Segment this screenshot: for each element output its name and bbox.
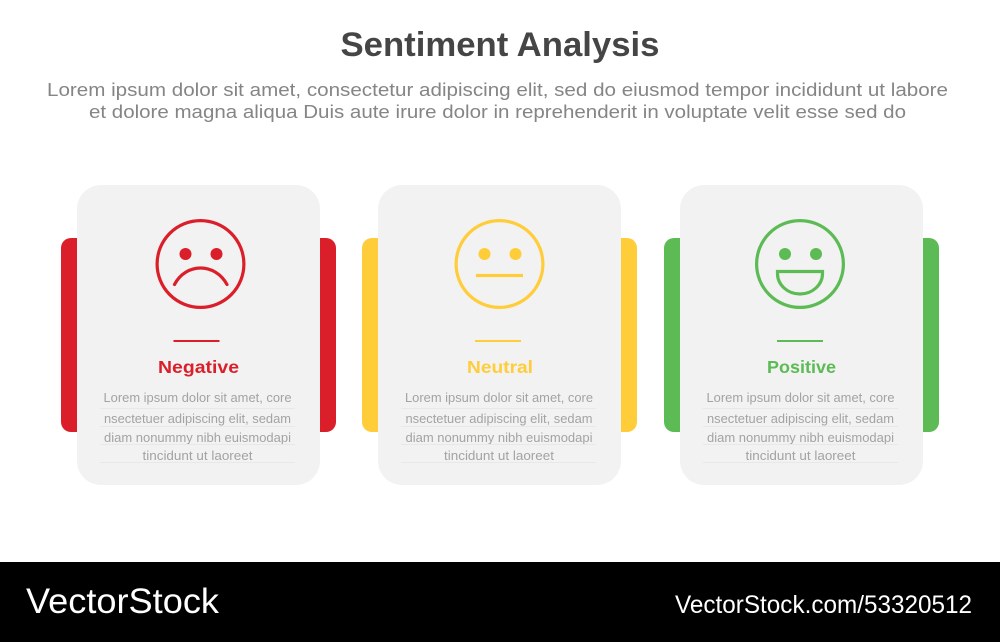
positive side tabs [664,238,939,432]
footer band [0,562,1000,642]
negative body text: tincidunt ut laoreet [142,449,253,463]
intro paragraph [47,79,948,122]
footer url: VectorStock.com/53320512 [675,591,972,619]
negative heading: Negative [158,357,239,377]
neutral body text: nsectetuer adipiscing elit, sedam [406,412,592,426]
positive body text: nsectetuer adipiscing elit, sedam [707,412,894,426]
icon: happy face [757,221,843,307]
panel: negative [61,185,336,485]
neutral side tabs [362,238,637,432]
negative body text: diam nonummy nibh euismodapi [104,431,291,445]
neutral body text: diam nonummy nibh euismodapi [406,431,592,445]
neutral body text: tincidunt ut laoreet [444,449,555,463]
negative body text: Lorem ipsum dolor sit amet, core [104,391,292,405]
panel: positive [664,185,939,485]
positive card [680,185,923,485]
icon: sad face [157,221,244,307]
intro paragraph: et dolore magna aliqua Duis aute irure dolor in reprehenderit in voluptate velit esse sed do [89,101,906,122]
negative body text: nsectetuer adipiscing elit, sedam [104,412,291,426]
negative divider [174,340,220,342]
footer logo: VectorStock [26,582,220,621]
title: Sentiment Analysis [340,26,660,64]
intro paragraph: Lorem ipsum dolor sit amet, consectetur adipiscing elit, sed do eiusmod tempor incididunt ut labore [47,79,948,100]
neutral body text: Lorem ipsum dolor sit amet, core [405,391,593,405]
positive body text: tincidunt ut laoreet [746,449,856,463]
neutral body text [401,391,596,463]
positive heading: Positive [767,357,836,377]
neutral divider [475,340,521,342]
positive body text: Lorem ipsum dolor sit amet, core [706,391,895,405]
negative side tabs [61,238,336,432]
panel: neutral [362,185,637,485]
negative body text [100,391,295,463]
negative card [77,185,320,485]
positive divider [777,340,823,342]
neutral heading: Neutral [467,357,533,377]
positive body text: diam nonummy nibh euismodapi [707,431,894,445]
icon: neutral face [456,221,543,307]
positive body text [703,391,898,463]
neutral card [378,185,621,485]
